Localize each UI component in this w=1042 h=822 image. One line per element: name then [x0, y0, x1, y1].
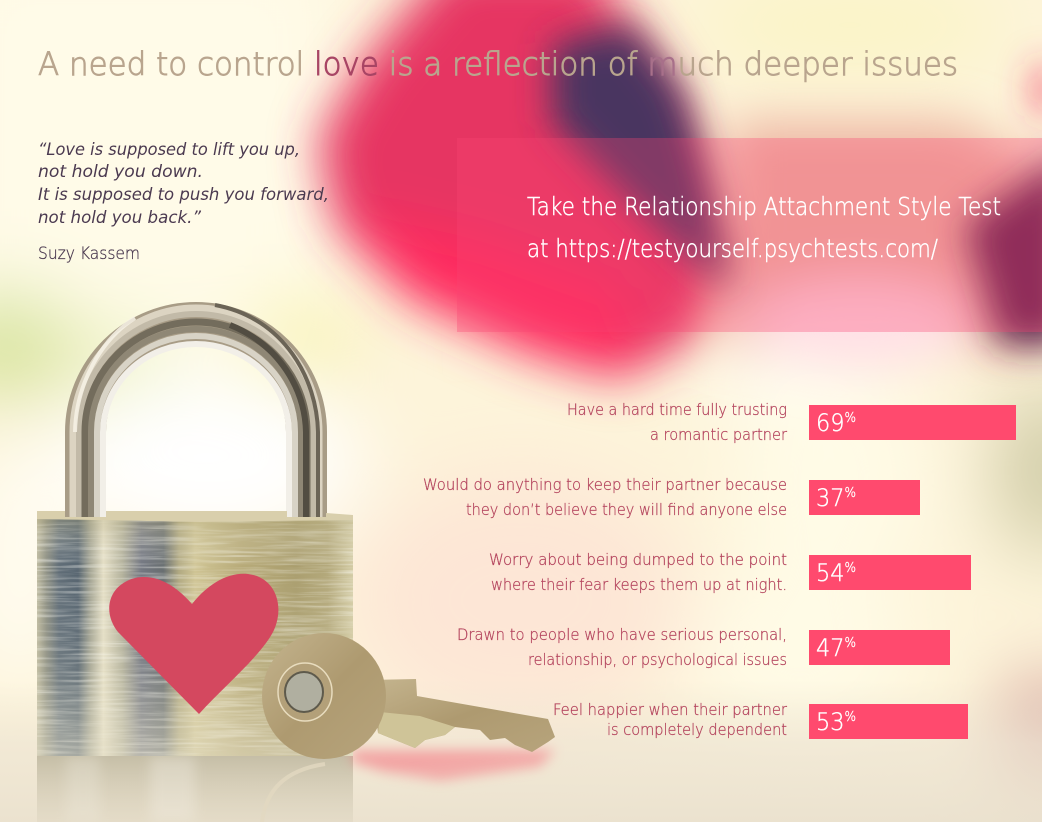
row 5: % — [844, 710, 856, 725]
row 3: where their fear keeps them up at night. — [491, 575, 787, 594]
lock body — [37, 519, 353, 756]
row 5: 53 — [816, 708, 847, 736]
row 3: % — [844, 561, 856, 576]
icon: key reflection — [262, 750, 555, 822]
call-to-action text — [527, 192, 1001, 263]
row 3: Worry about being dumped to the point — [489, 550, 787, 569]
row 3 — [489, 550, 971, 594]
quote: It is supposed to push you forward, — [38, 185, 329, 205]
row 1 — [567, 400, 1016, 444]
row 4: 47 — [816, 634, 847, 662]
row 3: 54 — [816, 559, 847, 587]
quote author: Suzy Kassem — [38, 244, 140, 264]
quote: not hold you back.” — [38, 208, 201, 228]
row 2: 37 — [816, 484, 847, 512]
row 5 — [553, 700, 968, 739]
icon: padlock — [37, 305, 353, 756]
quote: not hold you down. — [38, 162, 203, 182]
row 1: % — [844, 411, 856, 426]
floor gradient — [0, 680, 1042, 822]
title: A need to control love is a reflection of much deeper issues — [38, 45, 958, 83]
lock body top — [37, 511, 353, 530]
bar chart — [423, 400, 1016, 739]
icon: key — [262, 633, 555, 759]
row 2: % — [844, 486, 856, 501]
icon: heart — [109, 574, 278, 714]
row 4 — [457, 625, 950, 669]
call-to-action panel — [457, 138, 1042, 332]
row 2: they don’t believe they will find anyone else — [466, 500, 787, 519]
quote: “Love is supposed to lift you up, — [38, 140, 300, 160]
quote — [38, 140, 329, 228]
row 2 — [423, 475, 920, 519]
row 1: 69 — [816, 409, 847, 437]
icon: padlock reflection — [37, 756, 353, 822]
call-to-action text: at https://testyourself.psychtests.com/ — [527, 234, 938, 263]
row 1: a romantic partner — [650, 425, 787, 444]
shackle — [73, 305, 319, 520]
row 4: Drawn to people who have serious personal, — [457, 625, 787, 644]
row 2: Would do anything to keep their partner because — [423, 475, 787, 494]
row 4: % — [844, 636, 856, 651]
row 5: Feel happier when their partner — [553, 700, 787, 719]
row 5: is completely dependent — [607, 720, 787, 739]
row 4: relationship, or psychological issues — [528, 650, 787, 669]
row 1: Have a hard time fully trusting — [567, 400, 787, 419]
